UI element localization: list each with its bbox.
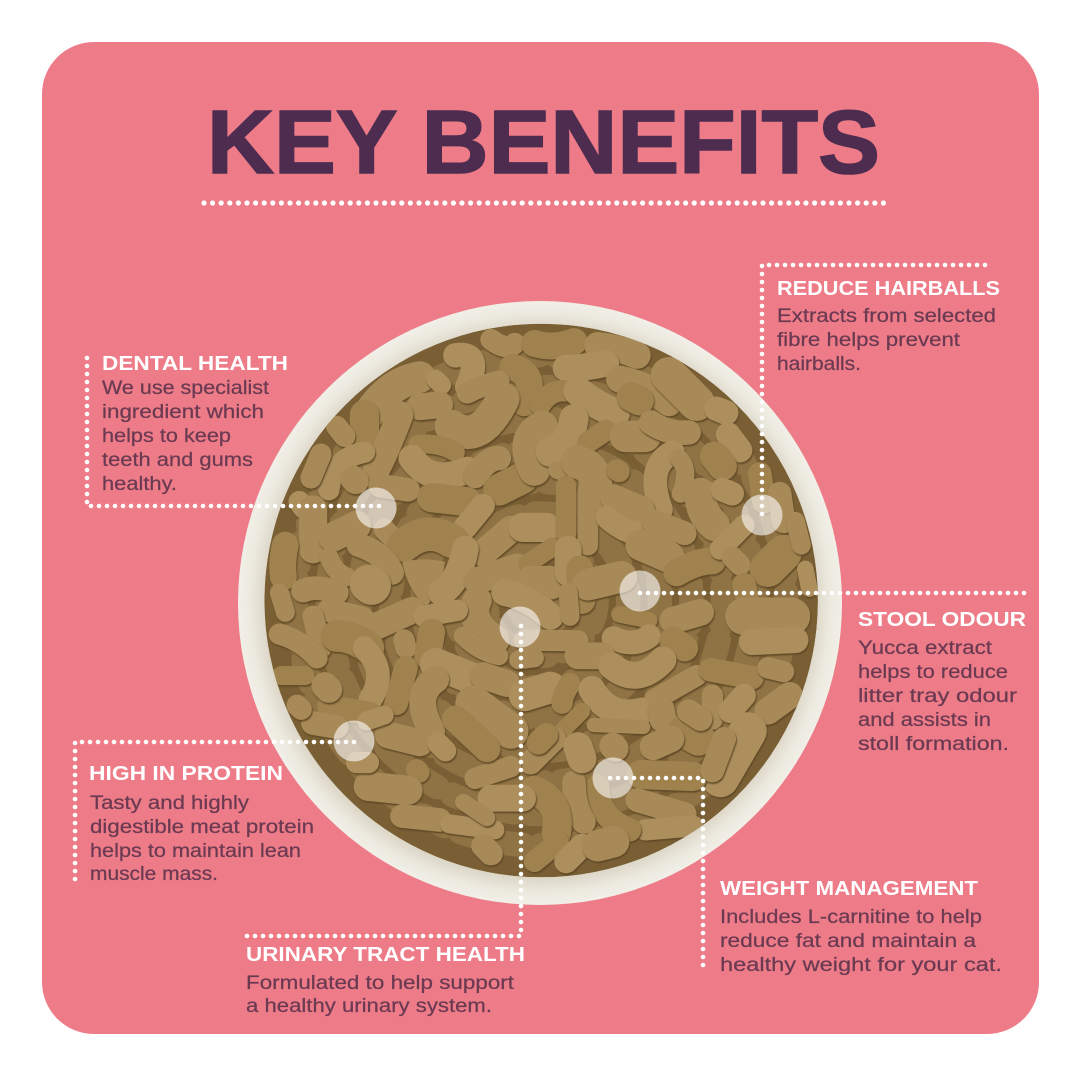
body text: healthy weight for your cat. bbox=[720, 954, 1002, 976]
connector line bbox=[762, 265, 985, 516]
body text: fibre helps prevent bbox=[777, 329, 961, 351]
heading: URINARY TRACT HEALTH bbox=[246, 944, 525, 966]
body text: litter tray odour bbox=[858, 685, 1018, 707]
body text: teeth and gums bbox=[102, 449, 253, 471]
body text bbox=[90, 792, 314, 885]
body text: Formulated to help support bbox=[246, 972, 515, 994]
connector line bbox=[610, 778, 703, 970]
marker: weight management bbox=[592, 758, 634, 798]
body text: muscle mass. bbox=[90, 863, 218, 885]
marker: high in protein bbox=[334, 720, 374, 762]
food bowl photo bbox=[238, 301, 842, 905]
body text: a healthy urinary system. bbox=[246, 995, 492, 1017]
bowl rim bbox=[238, 301, 842, 905]
body text bbox=[102, 377, 270, 495]
body text bbox=[777, 305, 996, 375]
body text bbox=[246, 972, 515, 1017]
callout: weight management bbox=[610, 778, 1002, 976]
body text: stoll formation. bbox=[858, 733, 1009, 755]
body text: helps to keep bbox=[102, 425, 231, 447]
body text: helps to reduce bbox=[858, 661, 1008, 683]
marker: stool odour bbox=[620, 570, 660, 612]
connector line bbox=[87, 358, 382, 506]
body text bbox=[720, 906, 1002, 976]
body text: ingredient which bbox=[102, 401, 264, 423]
body text: and assists in bbox=[858, 709, 991, 731]
body text: Yucca extract bbox=[858, 637, 993, 659]
callout: urinary tract health bbox=[246, 625, 525, 1017]
body text: Includes L-carnitine to help bbox=[720, 906, 982, 928]
marker: reduce hairballs bbox=[742, 494, 782, 536]
callout: dental health bbox=[87, 353, 382, 506]
body text: hairballs. bbox=[777, 353, 861, 375]
connector line bbox=[640, 591, 1026, 595]
heading: STOOL ODOUR bbox=[858, 609, 1027, 631]
callout: reduce hairballs bbox=[762, 265, 1000, 516]
title dotted underline bbox=[204, 200, 886, 206]
heading: HIGH IN PROTEIN bbox=[89, 763, 283, 785]
body text: healthy. bbox=[102, 473, 177, 495]
heading: DENTAL HEALTH bbox=[102, 353, 288, 375]
body text: Tasty and highly bbox=[90, 792, 249, 814]
callout: high in protein bbox=[75, 742, 358, 885]
marker: dental health bbox=[356, 488, 396, 528]
heading: WEIGHT MANAGEMENT bbox=[720, 878, 978, 900]
body text: digestible meat protein bbox=[90, 816, 314, 838]
body text: We use specialist bbox=[102, 377, 270, 399]
body text bbox=[858, 637, 1018, 755]
title: KEY BENEFITS bbox=[207, 93, 880, 193]
body text: helps to maintain lean bbox=[90, 840, 301, 862]
callout: stool odour bbox=[640, 593, 1027, 755]
marker: urinary tract health bbox=[500, 606, 540, 648]
kibble filling bbox=[264, 324, 818, 877]
body text: reduce fat and maintain a bbox=[720, 930, 976, 952]
body text: Extracts from selected bbox=[777, 305, 996, 327]
connector line bbox=[247, 625, 521, 936]
connector line bbox=[75, 742, 358, 879]
heading: REDUCE HAIRBALLS bbox=[777, 278, 1000, 300]
